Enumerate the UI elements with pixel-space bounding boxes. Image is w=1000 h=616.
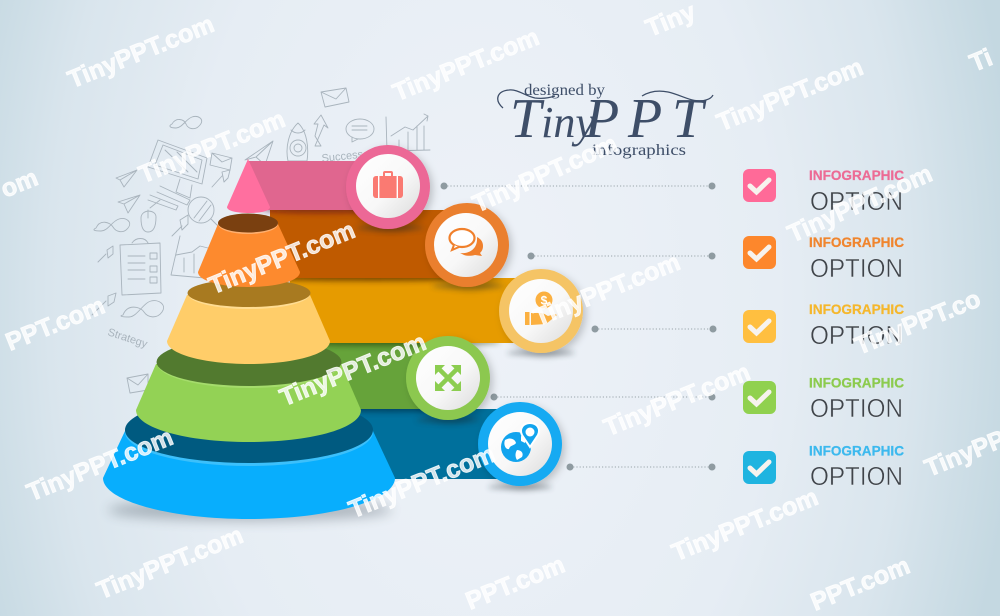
option 2 label: OPTION — [810, 253, 903, 283]
watermarks: TinyPPT.com — [205, 216, 359, 300]
doodle: arrow — [314, 115, 328, 146]
doodle: pushpins — [92, 170, 230, 315]
tier: pink cone — [227, 159, 270, 213]
option 5 label: OPTION — [810, 461, 903, 491]
doodle: rocket — [287, 123, 308, 161]
option 4 label: OPTION — [810, 393, 903, 423]
ribbon bands behind pyramid — [248, 161, 520, 479]
band: dark orange — [270, 210, 450, 278]
badge ground shadows — [356, 225, 575, 490]
option 5 title: INFOGRAPHIC — [809, 444, 904, 458]
option 2 title: INFOGRAPHIC — [809, 235, 904, 250]
doodle sketches — [92, 88, 430, 393]
tier: yellow — [167, 279, 330, 364]
option 4 title: INFOGRAPHIC — [809, 376, 904, 390]
icon: hand with dollar: $ — [541, 294, 548, 308]
logo script: Tiny: Tiny — [510, 88, 595, 150]
watermarks: Ti — [966, 43, 996, 78]
watermarks: TinyPPT.com — [64, 10, 218, 94]
connector 4 — [490, 394, 716, 400]
doodle: Success word: Success — [321, 149, 364, 165]
doodle: paper planes — [116, 141, 273, 213]
checkbox pink — [743, 169, 776, 202]
doodle: small chart — [171, 236, 208, 278]
logo: designed by TinyPPT infographics — [498, 82, 713, 159]
watermarks: TinyPPT.com — [23, 423, 177, 507]
watermarks: TinyPPT.co — [851, 285, 984, 361]
option 1 label: OPTION — [810, 186, 903, 216]
watermarks: TinyPPT.com — [600, 358, 754, 442]
band: green — [310, 343, 440, 409]
watermarks: TinyPPT.com — [93, 521, 247, 605]
tier: green — [136, 338, 361, 442]
layered pyramid — [103, 159, 395, 519]
logo small line: infographics: infographics — [592, 142, 686, 159]
watermarks: PPT.com — [462, 551, 569, 616]
badge: chat — [425, 203, 509, 287]
doodle: Strategy word: Strategy — [106, 326, 149, 351]
watermarks: TinyPPT.com — [276, 328, 430, 412]
badge: money — [499, 269, 583, 353]
checkbox blue — [743, 451, 776, 484]
connector 1 — [440, 182, 716, 190]
option 1 title: INFOGRAPHIC — [809, 168, 904, 183]
doodle: infinity signs — [94, 116, 202, 317]
logo flourishes — [498, 90, 713, 108]
option 1 — [743, 168, 904, 216]
icon: speech bubbles — [450, 229, 483, 256]
option 2 — [743, 235, 904, 283]
watermarks: TinyPPT.com — [468, 130, 622, 218]
watermarks: TinyPPT.com — [389, 23, 543, 107]
tier: orange — [198, 214, 300, 287]
icon: globe and pin — [501, 423, 539, 462]
watermarks: PPT.com — [2, 292, 109, 357]
watermarks: TinyPPT.com — [345, 440, 499, 524]
option 4 — [743, 376, 904, 423]
band: blue — [340, 409, 510, 479]
checkbox orange — [743, 236, 776, 269]
logo script: PPT: PPT — [584, 88, 707, 150]
pyramid ground shadow — [108, 499, 392, 521]
doodle: clipboard — [120, 238, 161, 295]
doodle: growth chart — [386, 114, 430, 151]
watermarks: TinyPPT.com — [783, 160, 937, 248]
option 5 — [743, 444, 904, 491]
badge: expand arrows — [406, 336, 490, 420]
badge: briefcase — [346, 145, 430, 229]
option 3 title: INFOGRAPHIC — [809, 302, 904, 317]
connector 5 — [566, 464, 716, 470]
watermarks: TinyPPT.com — [668, 483, 822, 567]
option 3 label: OPTION — [810, 320, 903, 350]
checkbox green — [743, 381, 776, 414]
watermarks: TinyPPT.com — [713, 53, 867, 137]
icon: briefcase — [373, 171, 403, 198]
connector dotted lines — [440, 182, 716, 470]
band: amber — [290, 278, 520, 343]
option 3 — [743, 302, 904, 350]
watermarks: TinyPPT.com — [530, 248, 684, 332]
watermarks: PPT.com — [807, 552, 914, 616]
doodle: monitor — [148, 140, 207, 210]
band: pink — [248, 161, 380, 210]
doodle: envelopes — [127, 88, 349, 393]
tier: blue base — [103, 397, 395, 519]
doodle: mouse and magnifier — [141, 197, 222, 232]
checkbox yellow — [743, 310, 776, 343]
watermarks: TinyPPT.com — [135, 105, 289, 189]
badge: globe — [478, 402, 562, 486]
connector 2 — [528, 252, 716, 260]
icon: expand arrows — [435, 365, 461, 391]
connector 3 — [592, 326, 716, 332]
logo small line: designed by: designed by — [524, 82, 605, 99]
doodle: speech bubble — [346, 119, 374, 142]
